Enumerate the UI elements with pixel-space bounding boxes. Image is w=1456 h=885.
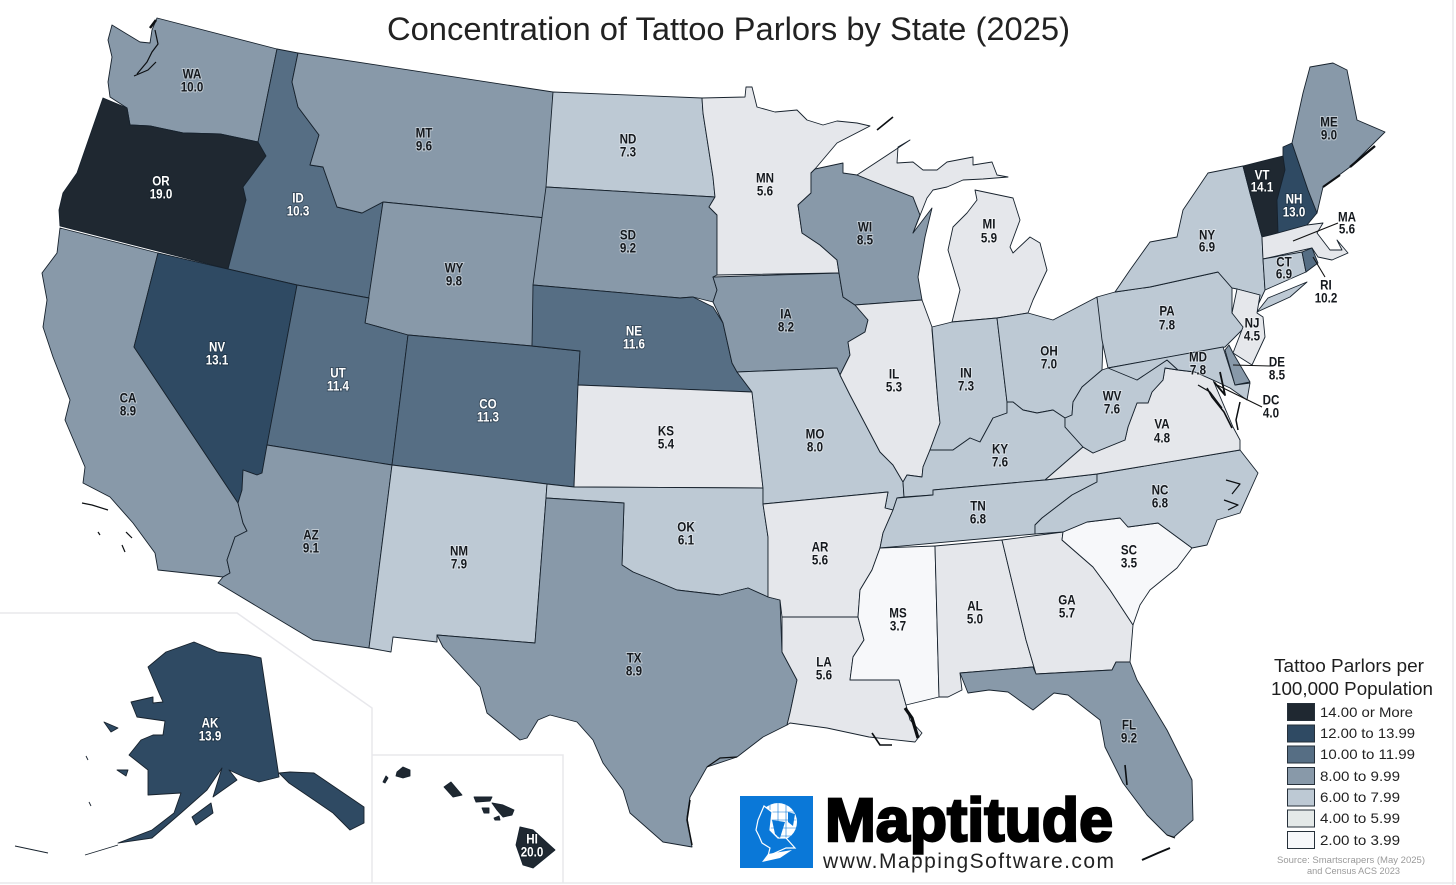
state: South Dakota — [533, 187, 717, 302]
state: Georgia: 5.7 — [1059, 606, 1075, 621]
state: Delaware: DE — [1269, 355, 1285, 370]
state: New Hampshire: 13.0 — [1283, 205, 1305, 220]
state: Illinois: IL — [889, 367, 899, 382]
state: Delaware: 8.5 — [1269, 368, 1285, 383]
legend labels: 10.00 to 11.99 — [1320, 746, 1415, 762]
state: Arkansas: AR — [812, 540, 828, 555]
state: Utah — [267, 285, 408, 465]
callout leader lines — [1217, 223, 1338, 407]
state: South Dakota: 9.2 — [620, 241, 636, 256]
state: Colorado: 11.3 — [477, 410, 499, 425]
logo url: www.MappingSoftware.com — [822, 850, 1114, 873]
state: Tennessee — [880, 474, 1097, 548]
state: Wisconsin: WI — [858, 220, 872, 235]
state: Illinois — [840, 300, 940, 482]
state: New Hampshire — [1277, 143, 1317, 233]
state: Massachusetts: 5.6 — [1339, 222, 1355, 237]
state: Indiana: 7.3 — [958, 379, 974, 394]
state: Minnesota — [702, 87, 870, 275]
state: Pennsylvania: 7.8 — [1159, 318, 1175, 333]
state: South Carolina: 3.5 — [1121, 556, 1137, 571]
state: Hawaii: HI — [526, 832, 538, 847]
state: Kansas: 5.4 — [658, 437, 674, 452]
state: Colorado — [392, 335, 580, 487]
label: District of Columbia: 4.0 — [1263, 406, 1279, 421]
state: New Jersey — [1232, 289, 1265, 365]
state: Missouri: 8.0 — [807, 440, 823, 455]
legend labels: 6.00 to 7.99 — [1320, 789, 1400, 805]
state: West Virginia — [1065, 360, 1178, 453]
state: South Dakota: SD — [620, 228, 636, 243]
state: Wisconsin: 8.5 — [857, 233, 873, 248]
state: Oklahoma: 6.1 — [678, 533, 694, 548]
state: North Carolina — [1035, 450, 1258, 548]
state: Texas: 8.9 — [626, 664, 642, 679]
state: Pennsylvania: PA — [1159, 304, 1175, 319]
state: Oklahoma — [546, 484, 768, 597]
state: Arizona — [218, 445, 392, 648]
state: Minnesota: 5.6 — [757, 184, 773, 199]
state: Wyoming — [365, 202, 546, 346]
state: New Jersey: 4.5 — [1244, 329, 1260, 344]
state: Maine — [1292, 63, 1385, 213]
state: Oklahoma: OK — [677, 520, 695, 535]
state: New York — [1115, 166, 1307, 312]
state: Iowa — [713, 273, 868, 375]
state: Louisiana: 5.6 — [816, 668, 832, 683]
state: New Mexico: NM — [450, 544, 468, 559]
legend labels: 2.00 to 3.99 — [1320, 832, 1400, 848]
state: California: CA — [120, 391, 136, 406]
state: Tennessee: 6.8 — [970, 512, 986, 527]
source note: Source: Smartscrapers (May 2025) — [1277, 855, 1425, 865]
state: New York: 6.9 — [1199, 240, 1215, 255]
state: Kansas — [574, 385, 763, 488]
state: Maryland: MD — [1189, 350, 1207, 365]
state: Alaska — [15, 642, 364, 855]
state: Mississippi: 3.7 — [890, 619, 906, 634]
label: District of Columbia: DC — [1263, 393, 1279, 408]
state: New Mexico — [369, 465, 547, 652]
state: Virginia: 4.8 — [1154, 431, 1170, 446]
state: Colorado: CO — [479, 397, 497, 412]
legend labels: 8.00 to 9.99 — [1320, 768, 1400, 784]
state: Florida: FL — [1122, 718, 1136, 733]
state: Maine: ME — [1320, 115, 1338, 130]
state: California: 8.9 — [120, 404, 136, 419]
state: Arizona: 9.1 — [303, 541, 319, 556]
title: Concentration of Tattoo Parlors by State (2025) — [387, 11, 1070, 47]
state: Michigan — [857, 140, 1047, 322]
state: Alaska: AK — [202, 716, 218, 731]
state: Oregon: OR — [152, 174, 170, 189]
state: New York: NY — [1199, 228, 1216, 243]
state: Utah: UT — [330, 366, 346, 381]
state: Nebraska: 11.6 — [623, 337, 645, 352]
state: Michigan: 5.9 — [981, 231, 997, 246]
state: Idaho: 10.3 — [287, 204, 309, 219]
state: Connecticut: CT — [1276, 255, 1292, 270]
state: West Virginia: WV — [1103, 389, 1122, 404]
state: Nebraska: NE — [626, 324, 642, 339]
state: Virginia — [1045, 368, 1240, 480]
state: Arkansas: 5.6 — [812, 553, 828, 568]
state: Georgia: GA — [1058, 593, 1076, 608]
state: Montana: 9.6 — [416, 139, 432, 154]
state: Virginia: VA — [1154, 417, 1170, 432]
state: Alaska: 13.9 — [199, 729, 221, 744]
state: North Dakota — [546, 92, 715, 197]
state: Rhode Island — [1302, 248, 1337, 306]
state: Kentucky: 7.6 — [992, 455, 1008, 470]
state: Idaho: ID — [292, 191, 304, 206]
state: North Carolina: NC — [1152, 483, 1168, 498]
state: Iowa: IA — [780, 307, 792, 322]
state: Wyoming: 9.8 — [446, 274, 462, 289]
state: Hawaii: 20.0 — [521, 845, 543, 860]
state: South Carolina: SC — [1121, 543, 1137, 558]
state: Idaho — [228, 49, 383, 298]
state: Washington — [108, 18, 277, 142]
state: Georgia — [1002, 532, 1133, 674]
state: Maine: 9.0 — [1321, 128, 1337, 143]
state: Kentucky: KY — [992, 442, 1009, 457]
state: New Hampshire: NH — [1286, 192, 1302, 207]
state: Oregon: 19.0 — [150, 187, 172, 202]
state: Wisconsin — [798, 163, 932, 305]
state: Florida — [960, 662, 1193, 837]
state: Delaware — [1225, 345, 1285, 385]
state: Maryland: 7.8 — [1190, 363, 1206, 378]
state: Massachusetts: MA — [1338, 210, 1356, 225]
state: North Carolina: 6.8 — [1152, 496, 1168, 511]
legend — [1271, 655, 1433, 876]
state: Hawaii — [383, 767, 555, 868]
islands: California Channel — [82, 503, 132, 552]
state: Kansas: KS — [658, 424, 674, 439]
state: California — [42, 228, 247, 577]
state: New Jersey: NJ — [1245, 316, 1259, 331]
state: Kentucky — [903, 402, 1083, 497]
state: Vermont — [1243, 156, 1285, 237]
state: Indiana — [930, 318, 1007, 450]
state: Minnesota: MN — [756, 171, 774, 186]
state: Massachusetts — [1262, 210, 1356, 260]
state: Nebraska — [532, 285, 752, 392]
label: District of Columbia — [1263, 393, 1279, 421]
state: Ohio: OH — [1040, 344, 1058, 359]
state: Washington: WA — [183, 67, 201, 82]
state: South Carolina — [1062, 518, 1192, 625]
state: Rhode Island: 10.2 — [1315, 291, 1337, 306]
state: New Mexico: 7.9 — [451, 557, 467, 572]
state: Indiana: IN — [960, 366, 972, 381]
source note — [1277, 855, 1425, 876]
state: Montana — [292, 53, 553, 218]
state: Wyoming: WY — [445, 261, 464, 276]
state: Pennsylvania — [1097, 272, 1245, 368]
state: Montana: MT — [416, 126, 433, 141]
state: Vermont: VT — [1255, 168, 1270, 183]
state: Missouri: MO — [806, 427, 825, 442]
state: Connecticut — [1263, 252, 1306, 290]
legend title: Tattoo Parlors per — [1274, 655, 1424, 676]
state: Arkansas — [763, 492, 893, 617]
state: Tennessee: TN — [970, 499, 986, 514]
state: Vermont: 14.1 — [1251, 180, 1273, 195]
state: Ohio: 7.0 — [1041, 357, 1057, 372]
state: Alabama: AL — [967, 599, 983, 614]
state: Michigan: MI — [983, 217, 995, 232]
logo wordmark: Maptitude — [825, 786, 1113, 854]
state: North Dakota: 7.3 — [620, 145, 636, 160]
state: Illinois: 5.3 — [886, 380, 902, 395]
state: Connecticut: 6.9 — [1276, 267, 1292, 282]
legend labels: 14.00 or More — [1320, 704, 1413, 720]
state: Florida: 9.2 — [1121, 731, 1137, 746]
state: Texas: TX — [627, 651, 642, 666]
state: Nevada: NV — [209, 340, 226, 355]
state: Washington: 10.0 — [181, 80, 203, 95]
state: Texas — [437, 498, 797, 847]
state: North Dakota: ND — [620, 132, 636, 147]
state: Iowa: 8.2 — [778, 320, 794, 335]
state: Louisiana — [782, 617, 922, 742]
legend title — [1271, 655, 1433, 699]
state: West Virginia: 7.6 — [1104, 402, 1120, 417]
state: Utah: 11.4 — [327, 379, 349, 394]
legend swatches — [1288, 704, 1314, 848]
state: Arizona: AZ — [303, 528, 319, 543]
state: Ohio — [997, 297, 1103, 418]
legend title: 100,000 Population — [1271, 678, 1433, 699]
logo: Maptitude — [740, 786, 1114, 873]
legend labels: 4.00 to 5.99 — [1320, 810, 1400, 826]
legend labels — [1320, 704, 1415, 848]
state: Louisiana: LA — [816, 655, 832, 670]
state: Mississippi: MS — [889, 606, 907, 621]
state: Maryland — [1108, 347, 1250, 400]
state: Oregon — [59, 98, 266, 269]
state: Missouri — [737, 368, 904, 510]
state: Nevada — [134, 253, 297, 503]
source note: and Census ACS 2023 — [1307, 866, 1400, 876]
state: Rhode Island: RI — [1320, 278, 1332, 293]
state: Alabama — [935, 540, 1036, 697]
state: Nevada: 13.1 — [206, 353, 228, 368]
legend labels: 12.00 to 13.99 — [1320, 725, 1415, 741]
state: Mississippi — [850, 546, 939, 705]
logo icon: globe and head — [740, 796, 813, 868]
state: Alabama: 5.0 — [967, 612, 983, 627]
